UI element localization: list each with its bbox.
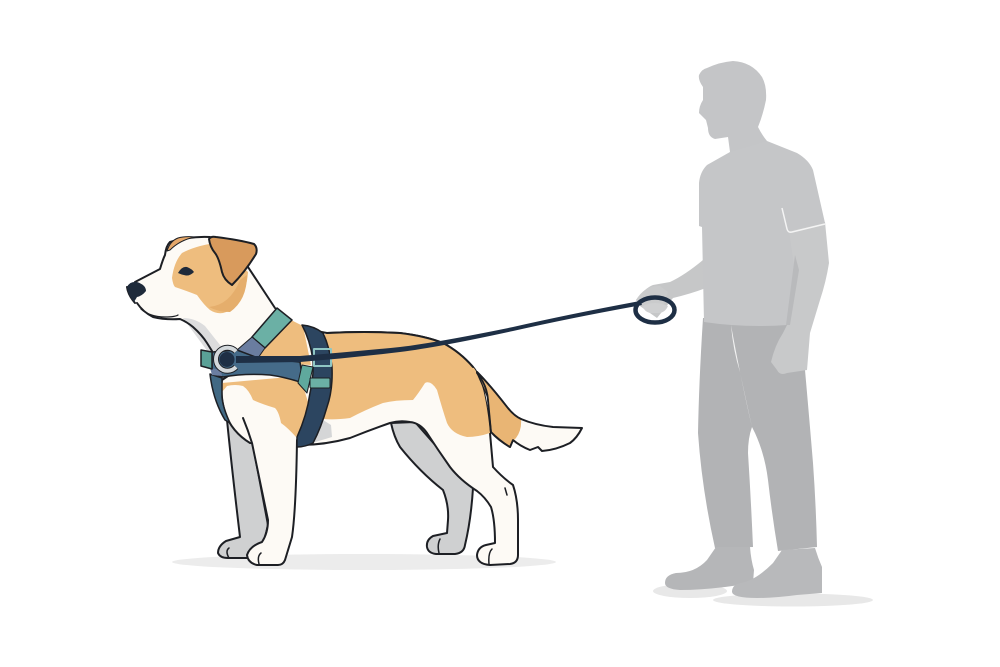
person: head and neck xyxy=(699,61,775,170)
leash: handle loop xyxy=(636,298,674,322)
harness: girth strap xyxy=(297,325,332,447)
dog: flank shadow xyxy=(312,420,332,443)
person: sleeve hem xyxy=(782,208,825,232)
person: fingers inside handle xyxy=(642,303,668,313)
ground shadows: person xyxy=(653,584,873,606)
person: left shoe xyxy=(665,547,754,590)
harness: neck panel purple xyxy=(237,337,265,358)
dog: back orange coat xyxy=(324,332,490,437)
dog: far front leg xyxy=(218,420,268,558)
dog: near leg outline xyxy=(243,418,297,565)
dog: chest orange patch xyxy=(222,376,308,437)
dog: tail outline xyxy=(477,372,521,447)
dog: harness xyxy=(201,308,332,447)
harness: purple lower tab xyxy=(210,368,222,376)
harness: lower left strap xyxy=(210,374,230,423)
harness: teal buckle xyxy=(310,378,330,388)
dog: mouth xyxy=(141,309,178,317)
dog: body topline xyxy=(327,332,473,367)
person silhouette xyxy=(636,61,829,598)
dog: shoulder orange xyxy=(250,320,311,365)
dog: ear xyxy=(209,237,257,285)
dog: forehead orange xyxy=(167,237,195,251)
dog: throat shadow xyxy=(183,318,224,352)
harness: teal connector xyxy=(298,365,313,393)
dog: body xyxy=(221,328,518,565)
dog: cheek shade xyxy=(209,275,247,312)
leash xyxy=(236,301,642,363)
person: near arm xyxy=(771,222,829,374)
dog: head orange patch xyxy=(172,243,248,313)
dog: tail orange xyxy=(478,373,521,447)
dog: head outline xyxy=(127,237,275,351)
dog: tail xyxy=(477,372,582,451)
dog xyxy=(127,237,674,565)
dog: toes xyxy=(227,488,507,564)
person: trousers xyxy=(698,318,817,551)
dog: far hind leg xyxy=(391,422,473,554)
person: arm-side shade xyxy=(786,255,799,325)
harness: front ring xyxy=(216,348,236,371)
person: gripping hand xyxy=(636,286,668,305)
harness: neck strap xyxy=(252,308,292,348)
dog: near front leg xyxy=(243,418,297,565)
person: t-shirt xyxy=(699,141,825,326)
harness: square slider xyxy=(314,349,331,366)
dog: neck and head white xyxy=(127,237,275,362)
ground shadow: dog xyxy=(172,554,556,570)
dog: eye xyxy=(178,267,194,276)
person: far arm xyxy=(636,260,706,318)
dog: nose xyxy=(127,282,146,302)
person: right shoe xyxy=(732,548,822,598)
harness: chest panel xyxy=(212,350,303,383)
person: trouser crease xyxy=(731,325,752,427)
harness: left teal loop xyxy=(201,350,212,369)
